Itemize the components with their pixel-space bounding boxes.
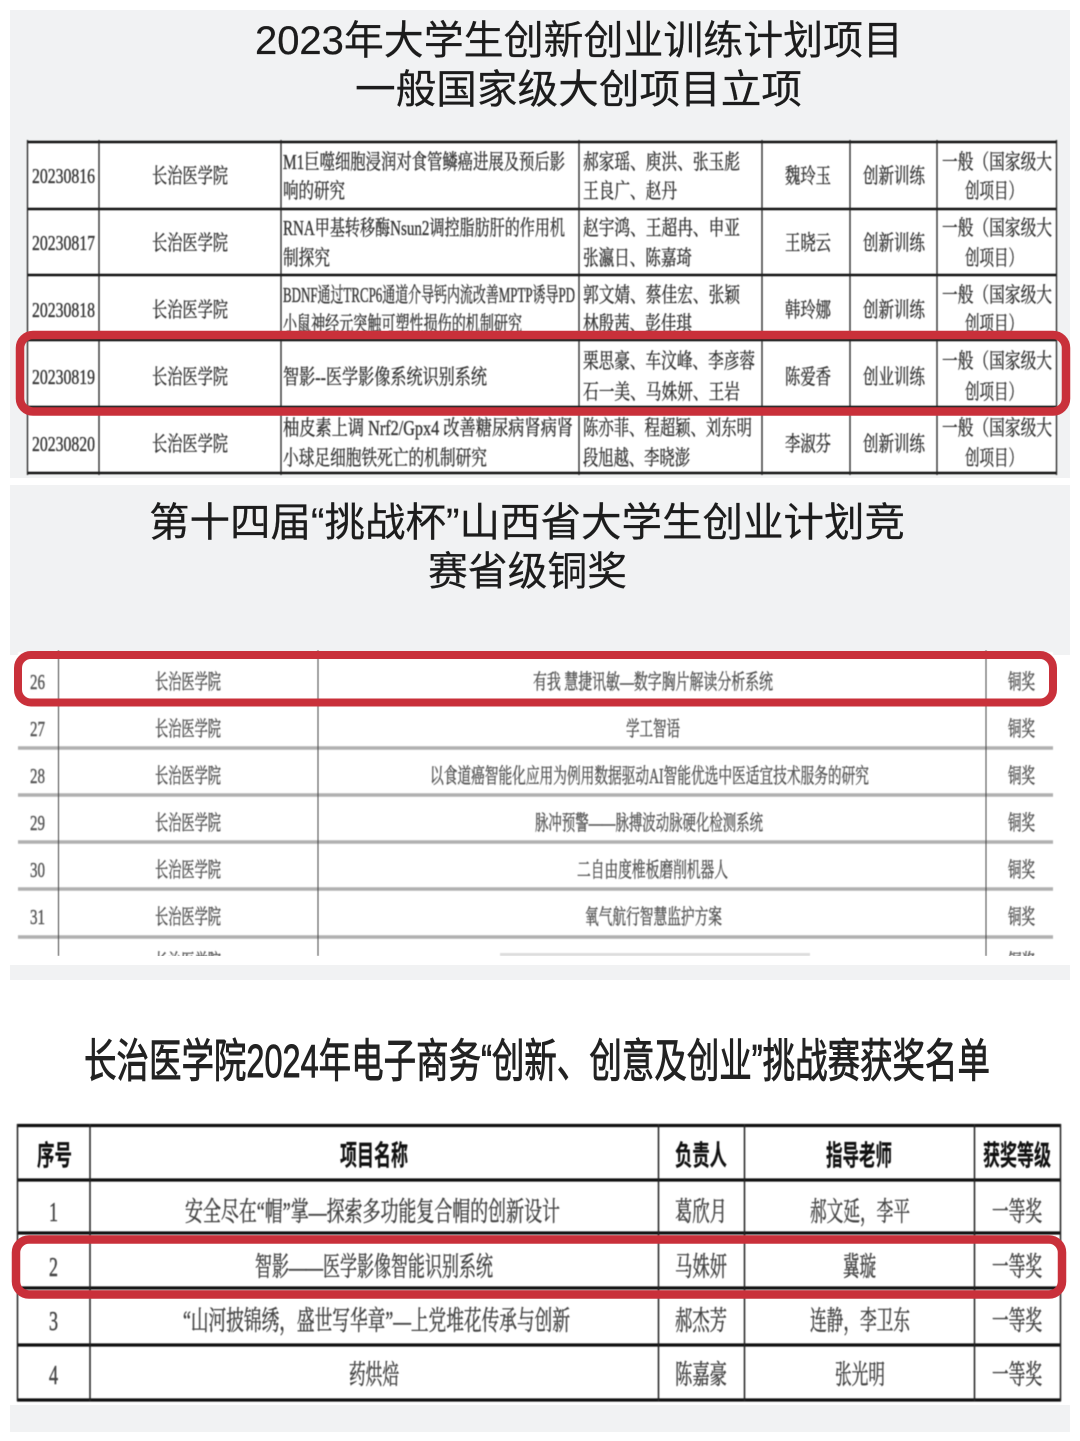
row 20230820: 创项目） xyxy=(965,446,1023,470)
row 20230820: 柚皮素上调 Nrf2/Gpx4 改善糖尿病肾病肾 xyxy=(283,416,573,440)
row 2: 一等奖 xyxy=(992,1252,1042,1282)
row 20230818: BDNF通过TRCP6通道介导钙内流改善MPTP诱导PD xyxy=(283,283,575,307)
row 26: 铜奖 xyxy=(1008,670,1035,694)
row 28 xyxy=(30,764,1035,788)
row 32 clipped: 长治医学院 xyxy=(155,950,221,974)
row 30 xyxy=(30,858,1035,882)
row 20230818 xyxy=(32,283,1052,336)
row 3 xyxy=(49,1306,1042,1336)
row 20230818: 小鼠神经元突触可塑性损伤的机制研究 xyxy=(283,312,522,336)
row 29: 29 xyxy=(30,811,45,835)
row 20230816: 郝家瑶、庾洪、张玉彪 xyxy=(583,150,740,174)
row 20230820: 段旭越、李晓澎 xyxy=(583,446,690,470)
row 4: 药烘焙 xyxy=(349,1360,399,1390)
row 20230817: 制探究 xyxy=(283,246,330,270)
row 20230817 xyxy=(32,216,1052,270)
row 32 clipped: 铜奖 xyxy=(1008,950,1035,974)
row 20230820: 李淑芬 xyxy=(785,432,831,456)
row 20230818: 郭文婧、蔡佳宏、张颖 xyxy=(583,283,741,307)
row 20230819: 石一美、马姝妍、王岩 xyxy=(583,380,740,404)
row 30: 长治医学院 xyxy=(155,858,221,882)
table header: 项目名称 xyxy=(340,1140,408,1171)
row 20230818: 长治医学院 xyxy=(152,298,228,322)
row 1: 郝文延，李平 xyxy=(810,1197,910,1227)
row 20230816: 创新训练 xyxy=(863,164,926,188)
row 27: 长治医学院 xyxy=(155,717,221,741)
row 20230817: 长治医学院 xyxy=(152,231,228,255)
row 3: 郝杰芳 xyxy=(675,1306,727,1336)
row 31: 氧气航行智慧监护方案 xyxy=(585,905,722,929)
row 20230816: 长治医学院 xyxy=(152,164,228,188)
row 28: 长治医学院 xyxy=(155,764,221,788)
row 31: 31 xyxy=(30,905,45,929)
row 2: 马姝妍 xyxy=(675,1252,727,1282)
row 4: 张光明 xyxy=(835,1360,885,1390)
row 20230817: 创项目） xyxy=(965,246,1023,270)
row 20230818: 林殷茜、彭佳琪 xyxy=(583,312,693,336)
row 20230819: 长治医学院 xyxy=(152,365,228,389)
table header xyxy=(37,1140,1051,1171)
row 31 xyxy=(30,905,1035,929)
row 2 xyxy=(49,1252,1042,1282)
row 4: 4 xyxy=(49,1360,58,1390)
row 26: 长治医学院 xyxy=(155,670,221,694)
row 2: 冀璇 xyxy=(843,1252,876,1282)
row 20230817: 20230817 xyxy=(32,231,95,255)
row 31: 铜奖 xyxy=(1008,905,1035,929)
row 28: 铜奖 xyxy=(1008,764,1035,788)
row 20230817: RNA甲基转移酶Nsun2调控脂肪肝的作用机 xyxy=(283,216,565,240)
row 20230817: 创新训练 xyxy=(863,231,926,255)
row 1: 1 xyxy=(49,1197,58,1227)
heading: national project approval: 2023年大学生创新创业训练计划项目 xyxy=(255,19,903,63)
table header: 序号 xyxy=(37,1140,72,1171)
row 20230819: 智影--医学影像系统识别系统 xyxy=(283,365,487,389)
row 20230816: 响的研究 xyxy=(283,179,345,203)
row 20230816: 魏玲玉 xyxy=(785,164,831,188)
row 20230820: 小球足细胞铁死亡的机制研究 xyxy=(283,446,487,470)
callout: red highlight on row 26 xyxy=(18,655,1053,702)
row 29: 长治医学院 xyxy=(155,811,221,835)
row 20230818: 创新训练 xyxy=(863,298,926,322)
row 3: 3 xyxy=(49,1306,58,1336)
row 20230817: 王晓云 xyxy=(785,231,831,255)
row 20230818: 韩玲娜 xyxy=(785,298,831,322)
row 29 xyxy=(30,811,1035,835)
row 3: 连静，李卫东 xyxy=(810,1306,910,1336)
callout: red highlight on row 2 xyxy=(16,1240,1062,1294)
row 31: 长治医学院 xyxy=(155,905,221,929)
heading: Challenge Cup bronze award: 赛省级铜奖 xyxy=(428,550,627,594)
row 4: 一等奖 xyxy=(992,1360,1042,1390)
row 4 xyxy=(49,1360,1042,1390)
row 20230820: 20230820 xyxy=(32,432,95,456)
row 20230819 xyxy=(32,349,1052,404)
row 20230816: 创项目） xyxy=(965,179,1023,203)
row 20230816: 20230816 xyxy=(32,164,95,188)
row 27: 铜奖 xyxy=(1008,717,1035,741)
row 26 xyxy=(30,670,1035,694)
row 26: 26 xyxy=(30,670,45,694)
row 28: 28 xyxy=(30,764,45,788)
row 30: 二自由度椎板磨削机器人 xyxy=(577,858,728,882)
panel: national project table xyxy=(27,140,1057,475)
heading: Challenge Cup bronze award xyxy=(149,501,905,594)
row 27 xyxy=(30,717,1035,741)
row 20230820: 创新训练 xyxy=(863,432,926,456)
panel: Challenge Cup table xyxy=(18,650,1053,974)
row 20230819: 20230819 xyxy=(32,365,95,389)
row 20230817: 张瀛日、陈嘉琦 xyxy=(583,246,692,270)
row 4: 陈嘉豪 xyxy=(675,1360,727,1390)
row 3: 一等奖 xyxy=(992,1306,1042,1336)
row 20230820 xyxy=(32,416,1052,470)
row 27: 学工智语 xyxy=(626,717,680,741)
row 20230818: 20230818 xyxy=(32,298,95,322)
row 20230819: 创项目） xyxy=(965,380,1023,404)
row 20230819: 陈爱香 xyxy=(785,365,831,389)
row 32 clipped xyxy=(157,950,1035,956)
row 20230820: 长治医学院 xyxy=(152,432,228,456)
row 30: 30 xyxy=(30,858,45,882)
row 1: 安全尽在“帽”掌—探索多功能复合帽的创新设计 xyxy=(185,1197,560,1227)
panel: e-commerce awards table xyxy=(17,1124,1061,1401)
row 20230816: M1巨噬细胞浸润对食管鳞癌进展及预后影 xyxy=(283,150,565,174)
table header: 指导老师 xyxy=(826,1140,892,1171)
row 2: 2 xyxy=(49,1252,58,1282)
callout: red highlight on 20230819 xyxy=(20,335,1066,412)
row 20230816: 王良广、赵丹 xyxy=(583,179,677,203)
heading: national project approval xyxy=(255,19,903,112)
row 20230817: 赵宇鸿、王超冉、申亚 xyxy=(583,216,740,240)
row 20230820: 陈亦菲、程超颖、刘东明 xyxy=(583,416,752,440)
row 29: 铜奖 xyxy=(1008,811,1035,835)
row 27: 27 xyxy=(30,717,45,741)
row 26: 有我 慧捷讯敏—数字胸片解读分析系统 xyxy=(533,670,773,694)
row 3: “山河披锦绣，盛世写华章”—上党堆花传承与创新 xyxy=(183,1306,570,1336)
row 1 xyxy=(49,1197,1042,1227)
row 30: 铜奖 xyxy=(1008,858,1035,882)
row 20230818: 创项目） xyxy=(965,312,1023,336)
row 20230819: 栗思豪、车汶峰、李彦蓉 xyxy=(583,349,755,373)
row 20230816 xyxy=(32,150,1052,203)
row 29: 脉冲预警——脉搏波动脉硬化检测系统 xyxy=(535,811,763,835)
heading: Challenge Cup bronze award: 第十四届“挑战杯”山西省大学生创业计划竞 xyxy=(149,501,905,545)
row 1: 一等奖 xyxy=(992,1197,1042,1227)
row 20230819: 创业训练 xyxy=(863,365,926,389)
table header: 负责人 xyxy=(675,1140,727,1171)
heading: national project approval: 一般国家级大创项目立项 xyxy=(355,68,802,112)
row 1: 葛欣月 xyxy=(675,1197,727,1227)
row 2: 智影——医学影像智能识别系统 xyxy=(255,1252,493,1282)
